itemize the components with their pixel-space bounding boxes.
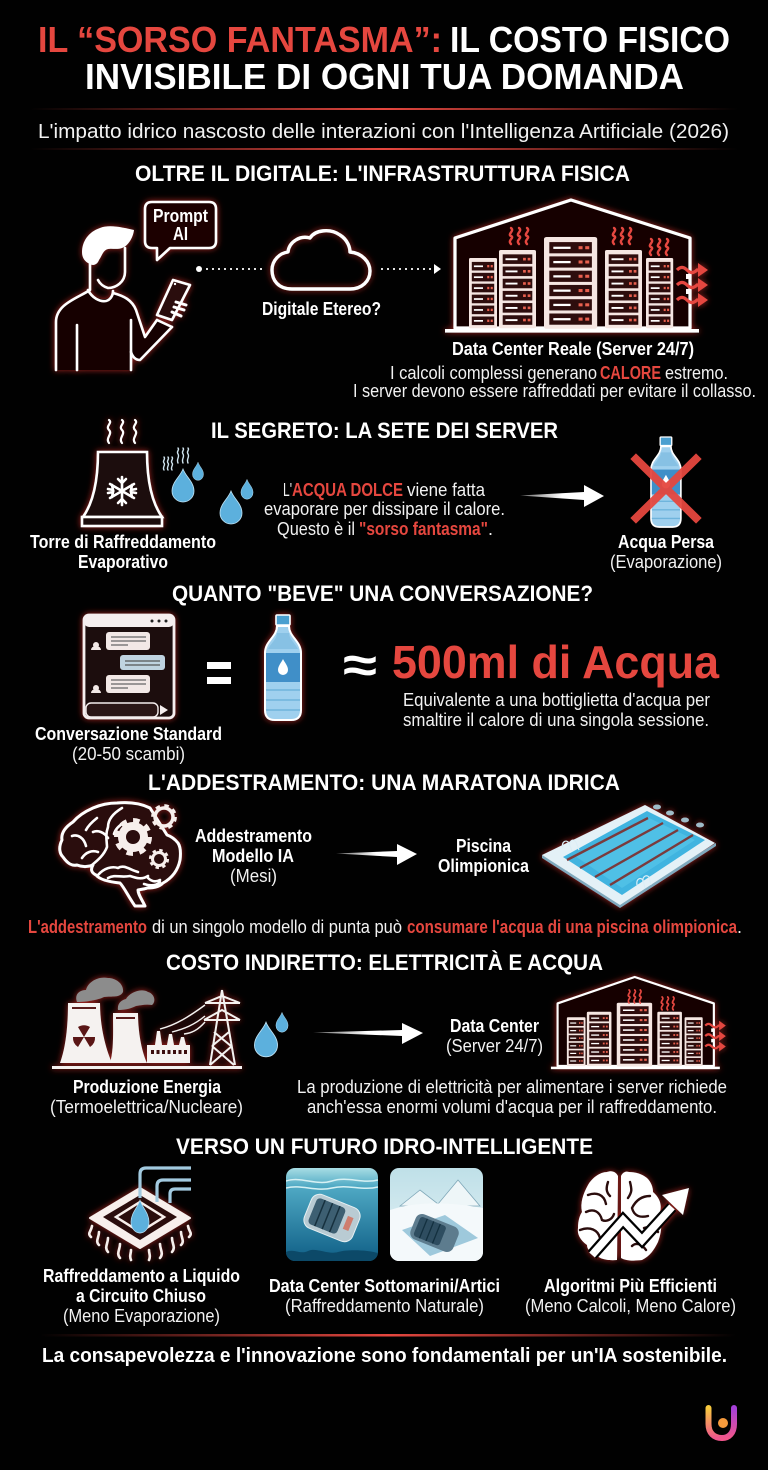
heading: L'ADDESTRAMENTO: UNA MARATONA IDRICA <box>148 770 620 795</box>
label: data center sottomarini: (Raffreddamento Naturale) <box>285 1296 484 1316</box>
arrow <box>313 1023 423 1044</box>
icon: brain with growth arrow <box>578 1171 689 1261</box>
panel: conversazione <box>35 581 719 764</box>
text: acqua dolce: Questo è il <box>277 519 355 539</box>
label: addestramento modello: Modello IA <box>212 846 294 866</box>
icon: speech bubble <box>145 202 216 260</box>
text: calore <box>353 363 756 401</box>
icon: person with phone <box>56 226 190 370</box>
label: produzione energia <box>50 1077 243 1117</box>
label: data center sottomarini: Data Center Sottomarini/Artici <box>269 1276 500 1296</box>
label: addestramento modello <box>195 826 312 886</box>
text: calore: CALORE <box>600 363 661 383</box>
text: acqua dolce: viene fatta <box>407 480 486 500</box>
label: piscina <box>438 836 530 876</box>
heading: VERSO UN FUTURO IDRO-INTELLIGENTE <box>176 1134 593 1159</box>
closing statement: La consapevolezza e l'innovazione sono fondamentali per un'IA sostenibile. <box>42 1345 727 1367</box>
heading: COSTO INDIRETTO: ELETTRICITÀ E ACQUA <box>166 950 603 975</box>
subtitle: L'impatto idrico nascosto delle interazioni con l'Intelligenza Artificiale (2026) <box>38 121 729 143</box>
title: INVISIBILE DI OGNI TUA DOMANDA <box>85 56 684 97</box>
text: calore: estremo. <box>665 363 728 383</box>
label: conversazione standard: Conversazione Standard <box>35 724 222 744</box>
label: addestramento modello: Addestramento <box>195 826 312 846</box>
label: data center sottomarini <box>269 1276 500 1316</box>
label: data center <box>446 1016 543 1056</box>
label: raffreddamento a liquido <box>43 1266 240 1326</box>
label: torre: Evaporativo <box>78 552 168 572</box>
heading: IL SEGRETO: LA SETE DEI SERVER <box>211 418 558 443</box>
label: algoritmi: (Meno Calcoli, Meno Calore) <box>525 1296 736 1316</box>
label: data center: Data Center <box>450 1016 539 1036</box>
label: data center: (Server 24/7) <box>446 1036 543 1056</box>
icon: water bottle <box>265 615 301 720</box>
icon: chat window <box>84 615 174 718</box>
text: produzione elettricita <box>297 1077 727 1117</box>
big number: 500ml di Acqua <box>392 636 719 688</box>
icon: cooling tower <box>82 420 162 526</box>
label: piscina: Piscina <box>456 836 512 856</box>
icon: swimming pool <box>542 804 716 908</box>
arrow <box>336 844 417 865</box>
text: calore: I calcoli complessi generano <box>390 363 597 383</box>
label: acqua persa: (Evaporazione) <box>610 552 722 572</box>
text: produzione elettricita: La produzione di elettricità per alimentare i server richiede <box>297 1077 727 1097</box>
label: produzione energia: (Termoelettrica/Nucleare) <box>50 1097 243 1117</box>
icon: speech bubble: AI <box>173 224 188 244</box>
text: acqua dolce <box>264 480 505 539</box>
icon: drops <box>254 1012 288 1057</box>
heading: QUANTO "BEVE" UNA CONVERSAZIONE? <box>172 581 593 606</box>
title: IL “SORSO FANTASMA”: <box>38 19 442 60</box>
text: piscina olimpionica: di un singolo modello di punta può <box>152 917 402 937</box>
text: equivalente: smaltire il calore di una singola sessione. <box>403 710 709 730</box>
text: acqua dolce: L' <box>283 480 292 500</box>
text: equivalente: Equivalente a una bottiglietta d'acqua per <box>403 690 710 710</box>
arrow <box>520 485 604 507</box>
arrow: dotted to data center <box>381 264 441 274</box>
heading: OLTRE IL DIGITALE: L'INFRASTRUTTURA FISICA <box>135 161 630 186</box>
label: piscina: Olimpionica <box>438 856 530 876</box>
approx: ≈ <box>343 637 377 693</box>
label: acqua persa: Acqua Persa <box>618 532 715 552</box>
text: acqua dolce: "sorso fantasma" <box>359 519 488 539</box>
text: piscina olimpionica <box>28 917 742 937</box>
icon: liquid cooled chip <box>89 1168 191 1260</box>
image: arctic data center <box>390 1168 483 1261</box>
icon: logo <box>708 1408 734 1438</box>
label: conversazione standard: (20-50 scambi) <box>72 744 185 764</box>
icon: evaporating drops <box>163 448 253 524</box>
label: torre: Torre di Raffreddamento <box>30 532 216 552</box>
panel: addestramento <box>28 770 742 937</box>
panel: infrastruttura fisica <box>56 161 756 401</box>
panel: la sete dei server <box>30 418 722 572</box>
icon: crossed bottle <box>636 437 696 527</box>
icon: power plant <box>52 978 242 1069</box>
panel: costo indiretto <box>50 950 727 1117</box>
title <box>38 19 730 97</box>
label: raffreddamento a liquido: a Circuito Chiuso <box>76 1286 206 1306</box>
text: acqua dolce: . <box>488 519 493 539</box>
label: produzione energia: Produzione Energia <box>73 1077 222 1097</box>
label: raffreddamento a liquido: Raffreddamento a Liquido <box>43 1266 240 1286</box>
image: underwater data center <box>286 1168 378 1261</box>
arrow: dotted to cloud <box>196 266 263 272</box>
label: conversazione standard <box>35 724 222 764</box>
icon: cloud <box>272 231 370 289</box>
label: torre <box>30 532 216 572</box>
label: data center reale: Data Center Reale (Server 24/7) <box>452 339 694 359</box>
icon: brain with gears <box>60 803 180 906</box>
label: digitale etereo: Digitale Etereo? <box>262 299 381 319</box>
label: addestramento modello: (Mesi) <box>230 866 277 886</box>
text: acqua dolce: ACQUA DOLCE <box>292 480 403 500</box>
text: piscina olimpionica: L'addestramento <box>28 917 147 937</box>
icon: small data center <box>551 977 726 1069</box>
icon: data center <box>445 200 708 333</box>
label: algoritmi <box>525 1276 736 1316</box>
text: produzione elettricita: anch'essa enormi volumi d'acqua per il raffreddamento. <box>307 1097 717 1117</box>
text: equivalente <box>403 690 710 730</box>
title: IL COSTO FISICO <box>450 19 730 60</box>
text: acqua dolce: evaporare per dissipare il calore. <box>264 499 505 519</box>
label: raffreddamento a liquido: (Meno Evaporazione) <box>63 1306 220 1326</box>
label: acqua persa <box>610 532 722 572</box>
text: piscina olimpionica: . <box>737 917 742 937</box>
label: algoritmi: Algoritmi Più Efficienti <box>544 1276 717 1296</box>
equals <box>207 662 231 684</box>
icon: speech bubble: Prompt <box>153 206 208 226</box>
panel: futuro idro-intelligente <box>43 1134 736 1326</box>
